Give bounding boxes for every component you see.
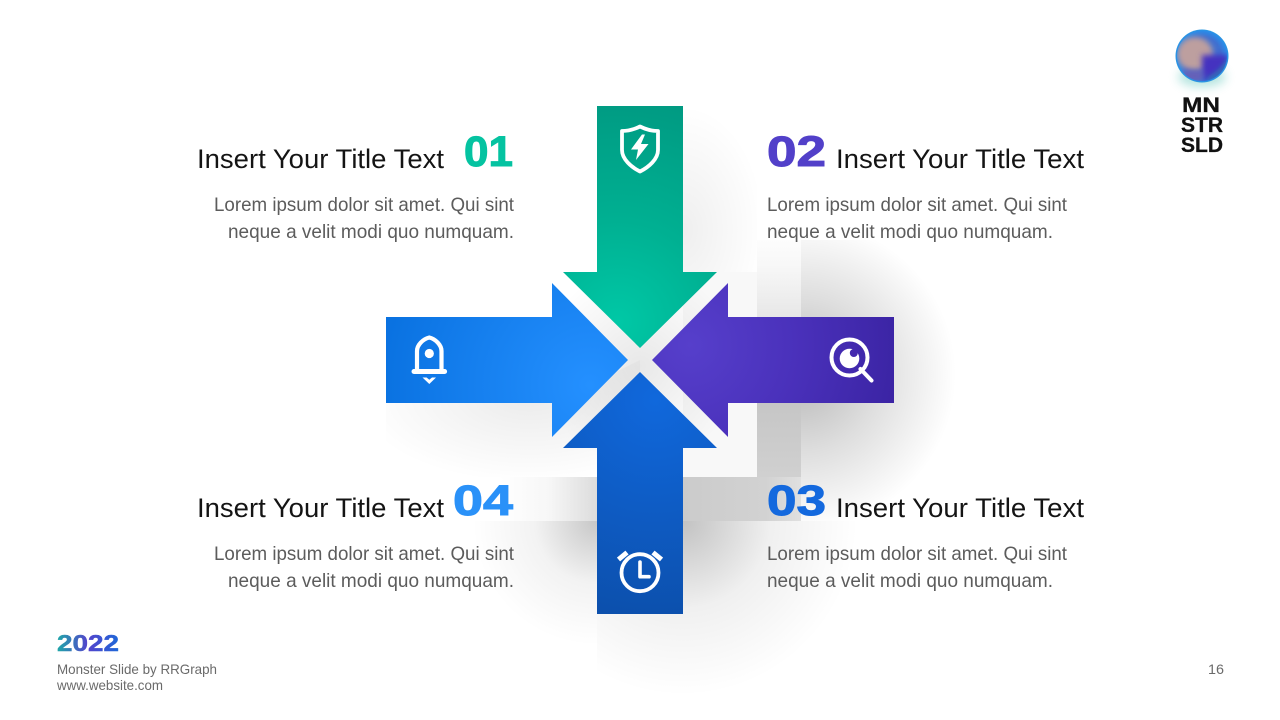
text block 04: Lorem ipsum dolor sit amet. Qui sint — [214, 543, 515, 565]
text block 04 — [197, 478, 515, 592]
text block 03: Insert Your Title Text — [836, 493, 1085, 523]
text block 02: Lorem ipsum dolor sit amet. Qui sint — [767, 194, 1068, 216]
icon: shield with bolt — [622, 126, 658, 172]
text block 02: 02 — [767, 129, 826, 176]
text block 01: 01 — [464, 129, 513, 176]
arrow shadows — [386, 100, 956, 696]
logo: MN — [1182, 94, 1220, 117]
arrow: bottom royal blue — [563, 372, 717, 614]
arrow: right purple — [652, 283, 894, 437]
logo: SLD — [1181, 134, 1223, 157]
text block 03 — [767, 478, 1085, 592]
arrow: left blue — [386, 283, 628, 437]
text block 01: Insert Your Title Text — [197, 144, 445, 174]
text block 02: neque a velit modi quo numquam. — [767, 221, 1053, 243]
logo — [1176, 30, 1228, 157]
icon: alarm clock — [618, 552, 662, 591]
footer website: www.website.com — [56, 677, 163, 693]
page number: 16 — [1208, 661, 1224, 677]
text block 01 — [197, 129, 515, 243]
text block 02: Insert Your Title Text — [836, 144, 1085, 174]
icon: rocket bell — [414, 338, 445, 384]
arrow: top teal — [563, 106, 717, 348]
footer credit: Monster Slide by RRGraph — [57, 661, 217, 677]
footer year: 2022 — [57, 630, 119, 656]
text block 03: 03 — [767, 478, 826, 525]
icon: magnifier with eye — [832, 340, 872, 380]
text block 03: Lorem ipsum dolor sit amet. Qui sint — [767, 543, 1068, 565]
logo: STR — [1181, 114, 1223, 137]
text block 01: neque a velit modi quo numquam. — [228, 221, 514, 243]
text block 04: 04 — [453, 478, 513, 525]
text block 04: Insert Your Title Text — [197, 493, 445, 523]
text block 02 — [767, 129, 1085, 243]
text block 03: neque a velit modi quo numquam. — [767, 570, 1053, 592]
text block 04: neque a velit modi quo numquam. — [228, 570, 514, 592]
text block 01: Lorem ipsum dolor sit amet. Qui sint — [214, 194, 515, 216]
